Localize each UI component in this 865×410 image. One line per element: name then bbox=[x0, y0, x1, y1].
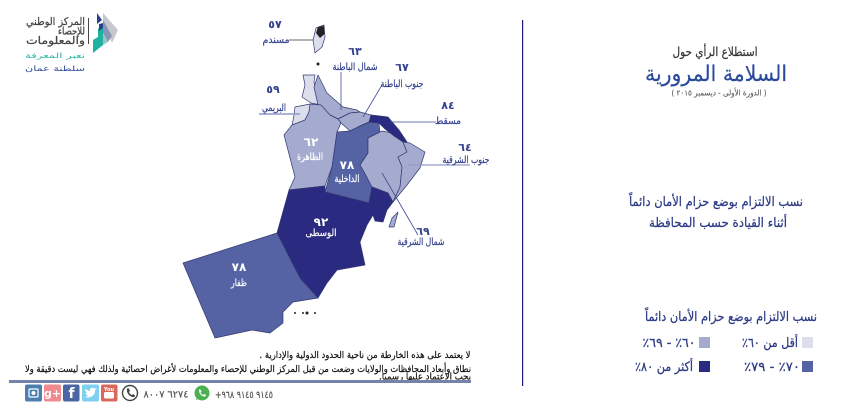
legend item: 60 to 69: ٪٦٩ - ٪٦٠ bbox=[642, 336, 696, 351]
chart subtitle: نسب الالتزام بوضع حزام الأمان دائماً bbox=[629, 192, 803, 210]
icon: twitter bbox=[82, 384, 99, 402]
chart subtitle: أثناء القيادة حسب المحافظة bbox=[649, 214, 787, 231]
leader lines bbox=[259, 40, 470, 235]
region: North Al Batinah bbox=[314, 75, 360, 119]
label: Dhofar bbox=[230, 260, 247, 289]
label: South Al Batinah: جنوب الباطنة bbox=[380, 79, 424, 90]
icon: facebook: f bbox=[68, 386, 75, 402]
legend item: over 80: أكثر من ٨٠٪ bbox=[635, 358, 693, 375]
logo name text bbox=[26, 16, 85, 47]
label: Dhofar: ظفار bbox=[230, 278, 247, 289]
label: North Al Batinah: شمال الباطنة bbox=[332, 62, 378, 73]
region: Musandam bbox=[313, 25, 325, 53]
region: Dhofar bbox=[183, 233, 318, 338]
label: Al Wusta bbox=[306, 215, 336, 239]
legend item: 70 to 79: ٪٧٩ - ٪٧٠ bbox=[744, 360, 800, 375]
legend item: under 60: أقل من ٦٠٪ bbox=[742, 334, 798, 351]
phone number: ٨٠٠٧ ٦٢٧٤ bbox=[144, 390, 188, 400]
label: Ad Dakhiliyah: الداخلية bbox=[334, 174, 360, 185]
label: South Ash Sharqiyah: جنوب الشرقية bbox=[442, 155, 490, 166]
label: South Al Batinah bbox=[380, 61, 424, 90]
label: Al Buraimi bbox=[262, 83, 286, 114]
region: Al Dhahirah bbox=[284, 104, 341, 190]
heading: edition date: ( الدورة الأولى - ديسمبر ٢٠١٥ ) bbox=[672, 88, 766, 98]
icon: google plus: g+ bbox=[44, 387, 61, 400]
label: North Al Batinah bbox=[332, 45, 378, 73]
whatsapp number: +٩٦٨ ٩١٤٥ ٩١٤٥ bbox=[215, 390, 273, 401]
label: Ad Dakhiliyah: ٧٨ bbox=[340, 158, 355, 172]
label: Al Buraimi: البريمي bbox=[262, 103, 286, 114]
footer bar bbox=[9, 380, 471, 383]
vertical divider bbox=[522, 20, 523, 386]
survey heading bbox=[645, 43, 787, 98]
region: South Al Batinah bbox=[338, 112, 371, 131]
heading: road safety: السلامة المرورية bbox=[645, 62, 787, 87]
heading: survey on: استطلاع الرأي حول bbox=[672, 43, 758, 60]
label: North Ash Sharqiyah: ٦٩ bbox=[416, 225, 430, 238]
label: Muscat: مسقط bbox=[435, 116, 461, 127]
region: Ad Dakhiliyah bbox=[325, 122, 380, 203]
region: North Ash Sharqiyah bbox=[360, 131, 407, 202]
label: Al Dhahirah: الظاهرة bbox=[297, 152, 323, 163]
Hallaniyat islands bbox=[294, 312, 316, 314]
label: North Al Batinah: ٦٣ bbox=[348, 45, 362, 58]
label: Al Dhahirah bbox=[297, 135, 323, 163]
region: Masirah island bbox=[389, 212, 398, 227]
logo: statistics centre bbox=[25, 13, 118, 73]
logo name text: المركز الوطني bbox=[26, 16, 85, 28]
chart subtitle bbox=[629, 192, 803, 231]
label: North Ash Sharqiyah bbox=[398, 225, 444, 248]
logo mark bbox=[93, 13, 118, 53]
icon: youtube bbox=[101, 384, 118, 402]
label: Muscat bbox=[435, 99, 461, 127]
icon: whatsapp bbox=[194, 386, 210, 400]
label: South Ash Sharqiyah: ٦٤ bbox=[458, 141, 472, 154]
region: South Ash Sharqiyah bbox=[393, 142, 425, 202]
label: Al Wusta: ٩٢ bbox=[314, 215, 329, 229]
label: Ad Dakhiliyah bbox=[334, 158, 360, 185]
social icons and contact numbers bbox=[25, 384, 273, 402]
label: Musandam bbox=[262, 18, 290, 46]
icon: instagram bbox=[25, 384, 42, 402]
logo tagline: نعبر المعرفة bbox=[25, 51, 85, 60]
region: Muscat bbox=[369, 115, 407, 142]
label: Al Wusta: الوسطى bbox=[306, 228, 336, 239]
logo country: سلطنة عمان bbox=[25, 64, 85, 73]
region: Al Wusta bbox=[277, 186, 393, 298]
logo name text: والمعلومات bbox=[26, 35, 85, 47]
label: North Ash Sharqiyah: شمال الشرقية bbox=[398, 237, 444, 248]
label: Al Dhahirah: ٦٢ bbox=[304, 135, 319, 149]
legend bbox=[635, 307, 817, 375]
label: Muscat: ٨٤ bbox=[441, 99, 455, 112]
label: South Al Batinah: ٦٧ bbox=[395, 61, 409, 74]
logo name text: للإحصاء bbox=[58, 26, 85, 38]
disclaimer text: لا يعتمد على هذه الخارطة من ناحية الحدود الدولية والإدارية . bbox=[260, 350, 470, 361]
disclaimer text: نطاق وأبعاد المحافظات والولايات وضعت من قبل المركز الوطني للإحصاء والمعلومات لأغراض احصائية ولذلك فهي ليست دقيقة ولا bbox=[25, 362, 471, 375]
icon: facebook bbox=[63, 384, 80, 402]
label: Musandam: مسندم bbox=[262, 35, 290, 46]
disclaimer text bbox=[25, 350, 471, 382]
label: Musandam: ٥٧ bbox=[268, 18, 282, 31]
legend title: نسب الالتزام بوضع حزام الأمان دائماً bbox=[645, 307, 817, 325]
disclaimer text: يجب الاعتماد عليها رسميا. bbox=[379, 372, 471, 382]
icon: phone bbox=[122, 386, 138, 400]
label: Dhofar: ٧٨ bbox=[232, 260, 247, 274]
label: South Ash Sharqiyah bbox=[442, 141, 490, 166]
label: Al Buraimi: ٥٩ bbox=[266, 83, 280, 96]
icon: youtube: You bbox=[103, 387, 115, 393]
map of Oman by governorate bbox=[183, 25, 425, 338]
region: Al Buraimi bbox=[292, 75, 321, 126]
